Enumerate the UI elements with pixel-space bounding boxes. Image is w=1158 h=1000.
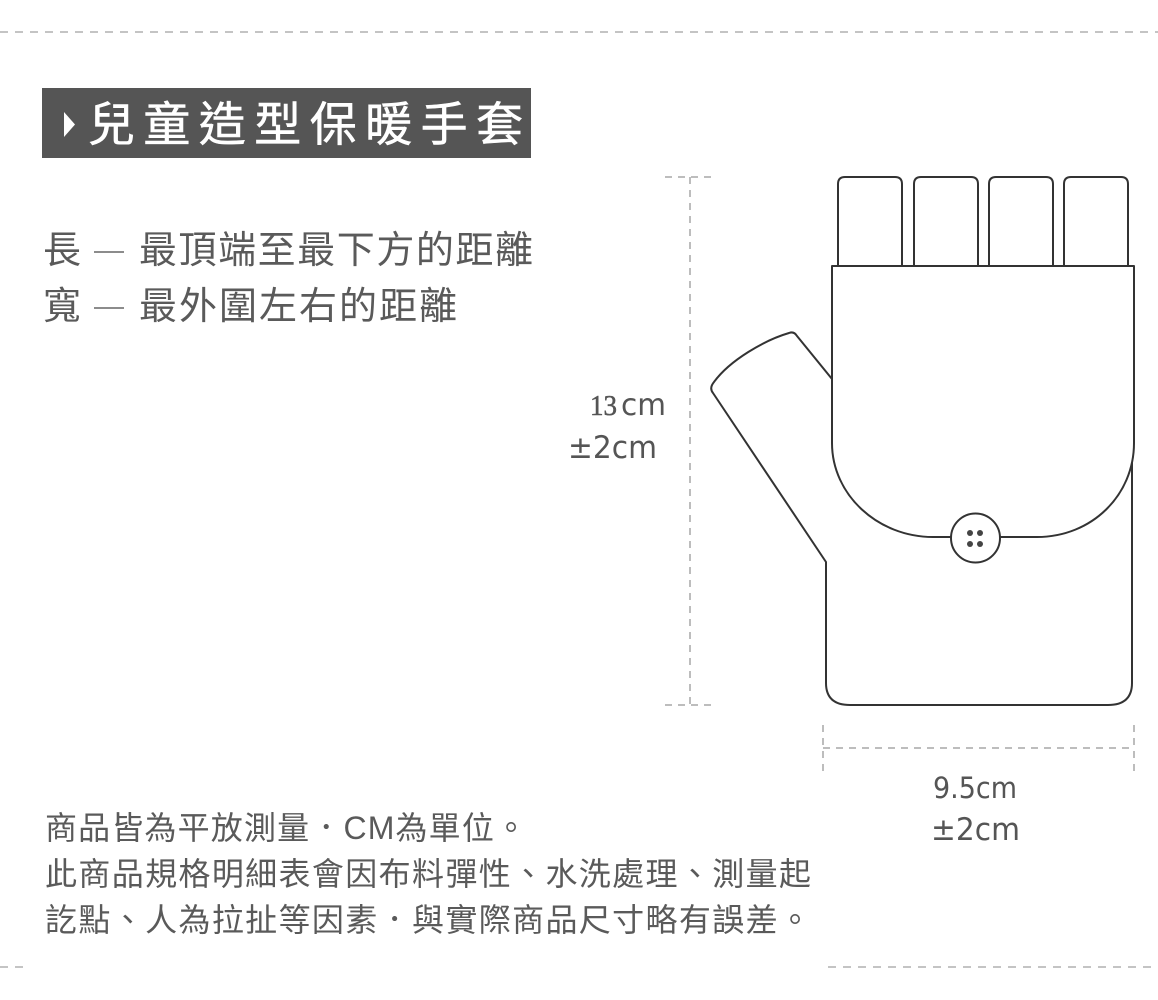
glove illustration [711, 177, 1134, 705]
finger 2 [914, 177, 978, 267]
measurement note text block: 商品皆為平放測量．CM為單位。 [45, 810, 527, 846]
measurement note text block: 此商品規格明細表會因布料彈性、水洗處理、測量起 [45, 856, 811, 892]
definitions text block: 最頂端至最下方的距離 [139, 230, 533, 272]
width measurement label: ±2cm [931, 812, 1020, 848]
width dimension line [823, 725, 1134, 772]
mitten flap [832, 266, 1134, 537]
finger 4 [1064, 177, 1128, 267]
title text: 兒童造型保暖手套 [88, 98, 523, 151]
height measurement label: cm [621, 388, 666, 423]
height measurement label: ±2cm [568, 430, 657, 466]
height dimension line [665, 177, 714, 705]
title banner [42, 88, 531, 158]
width measurement label: 9.5cm [933, 771, 1017, 805]
definitions text block [43, 230, 533, 328]
finger 3 [989, 177, 1053, 267]
height measurement label: 13 [590, 391, 617, 422]
finger 1 [838, 177, 902, 267]
definitions text block: 最外圍左右的距離 [139, 286, 457, 328]
length definition: 長 [43, 230, 81, 272]
measurement note text block: 訖點、人為拉扯等因素．與實際商品尺寸略有誤差。 [45, 902, 811, 938]
width definition: 寬 [43, 286, 81, 328]
measurement note text block [45, 810, 811, 938]
width measurement label [931, 771, 1020, 848]
glove lower body and thumb [711, 332, 1132, 705]
height measurement label [568, 388, 666, 466]
button [951, 514, 1000, 562]
icon: triangle marker [64, 112, 75, 137]
